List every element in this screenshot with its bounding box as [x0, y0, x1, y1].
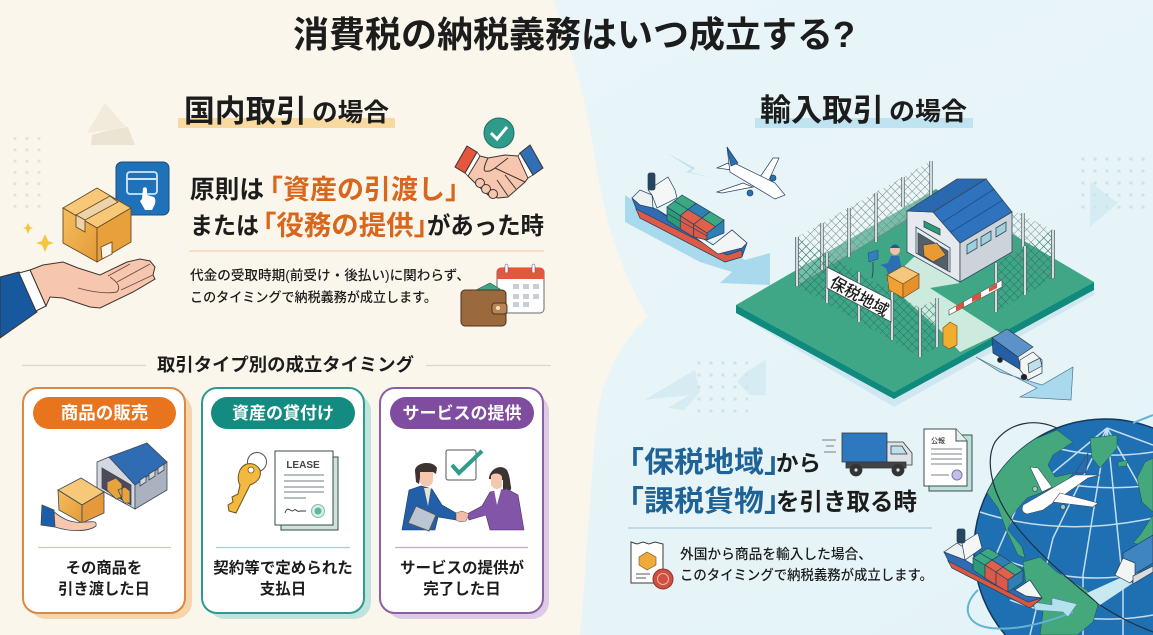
main statement: import: から — [776, 451, 821, 476]
main statement: import: 「課税貨物」 — [614, 485, 794, 518]
icon: open hand with sleeve — [0, 259, 155, 338]
main statement: があった時 — [427, 212, 544, 240]
heading: domestic: 国内取引 — [184, 94, 307, 129]
label text: sale of goods: 引き渡した日 — [58, 580, 150, 598]
label text: lending of assets: 支払日 — [260, 580, 306, 598]
icon: handshake people with check — [402, 450, 524, 531]
decorative shapes right — [644, 152, 1153, 420]
icon: key and lease — [228, 451, 338, 530]
main statement: 原則は — [190, 176, 264, 204]
ship on globe — [944, 529, 1042, 608]
card: provision of services — [380, 388, 549, 619]
label text: sale of goods — [58, 560, 150, 598]
note text — [190, 267, 470, 305]
arrow: out of bonded area — [976, 357, 1073, 400]
label text: provision of services — [400, 558, 524, 598]
light path to gate — [887, 255, 1000, 352]
main statement: import: 「保税地域」 — [614, 446, 794, 479]
main statement: import: を引き取る時 — [776, 489, 917, 516]
icon: calendar and wallet — [461, 264, 544, 326]
label text: lending of assets: 契約等で定められた — [213, 558, 353, 577]
icon: key and lease: LEASE — [286, 460, 320, 471]
card: sale of goods — [23, 388, 192, 619]
note text: このタイミングで納税義務が成立します。 — [190, 289, 437, 305]
icon: sparkles — [23, 223, 54, 252]
note text: import — [680, 546, 933, 583]
label: provision of services: サービスの提供 — [402, 403, 522, 423]
heading: import: 輸入取引 — [760, 93, 884, 128]
main statement: 「資産の引渡し」 — [256, 175, 472, 205]
icon: delivery truck — [822, 433, 912, 476]
label: lending of assets — [211, 397, 355, 429]
label: sale of goods — [33, 397, 176, 429]
heading: import: の場合 — [889, 98, 967, 126]
main statement: または — [190, 213, 259, 240]
panel: domestic transactions — [0, 94, 551, 619]
illustration: globe with trade routes — [944, 415, 1153, 635]
heading: domestic — [178, 94, 395, 129]
main statement: import — [614, 446, 917, 518]
note text: import: このタイミングで納税義務が成立します。 — [680, 567, 933, 583]
decorative shapes left — [6, 103, 135, 215]
label text: sale of goods: その商品を — [66, 560, 142, 577]
card: lending of assets — [202, 388, 371, 619]
label text: provision of services: サービスの提供が — [400, 558, 524, 577]
icon: customs document — [924, 429, 972, 491]
airplane on globe — [1022, 453, 1100, 514]
globe body — [974, 419, 1153, 635]
panel: import transactions — [614, 93, 1153, 635]
arrow: into bonded area — [625, 195, 770, 285]
label text: provision of services: 完了した日 — [423, 580, 501, 598]
icon: warehouse handover — [41, 443, 167, 531]
note text: 代金の受取時期(前受け・後払い)に関わらず、 — [190, 267, 470, 283]
icon: airplane — [667, 147, 785, 199]
icon: handshake with check — [455, 118, 543, 198]
label: sale of goods: 商品の販売 — [61, 403, 148, 423]
main statement: 「役務の提供」 — [249, 211, 441, 241]
front fences — [797, 230, 1053, 357]
icon: customs document: 公報 — [931, 436, 945, 445]
icon: truck leaving — [992, 329, 1042, 380]
orbit lines — [968, 415, 1153, 632]
icon: cargo ship — [632, 173, 747, 262]
label: provision of services — [390, 397, 534, 429]
note text: import: 外国から商品を輸入した場合、 — [680, 546, 872, 562]
section heading: timing by transaction type: 取引タイプ別の成立タイミング — [157, 354, 414, 375]
label: lending of assets: 資産の貸付け — [232, 403, 334, 423]
sign: bonded area: 保税地域 — [827, 273, 891, 320]
warehouse — [907, 179, 1012, 282]
back fences — [797, 161, 1053, 286]
heading: domestic: の場合 — [312, 99, 389, 127]
cargo box — [887, 266, 919, 298]
truck on globe — [1115, 535, 1153, 584]
label text: lending of assets — [213, 558, 353, 598]
heading: import — [755, 93, 973, 128]
route bands — [1033, 578, 1133, 617]
illustration: bonded area platform — [736, 161, 1094, 407]
icon: parcel box — [63, 188, 131, 262]
main statement — [190, 175, 544, 241]
worker — [868, 244, 902, 278]
gate barrier — [943, 280, 1002, 349]
icon: import receipt — [631, 542, 673, 589]
title: 消費税の納税義務はいつ成立する? — [293, 14, 855, 55]
icon: payment card tile — [116, 162, 169, 215]
